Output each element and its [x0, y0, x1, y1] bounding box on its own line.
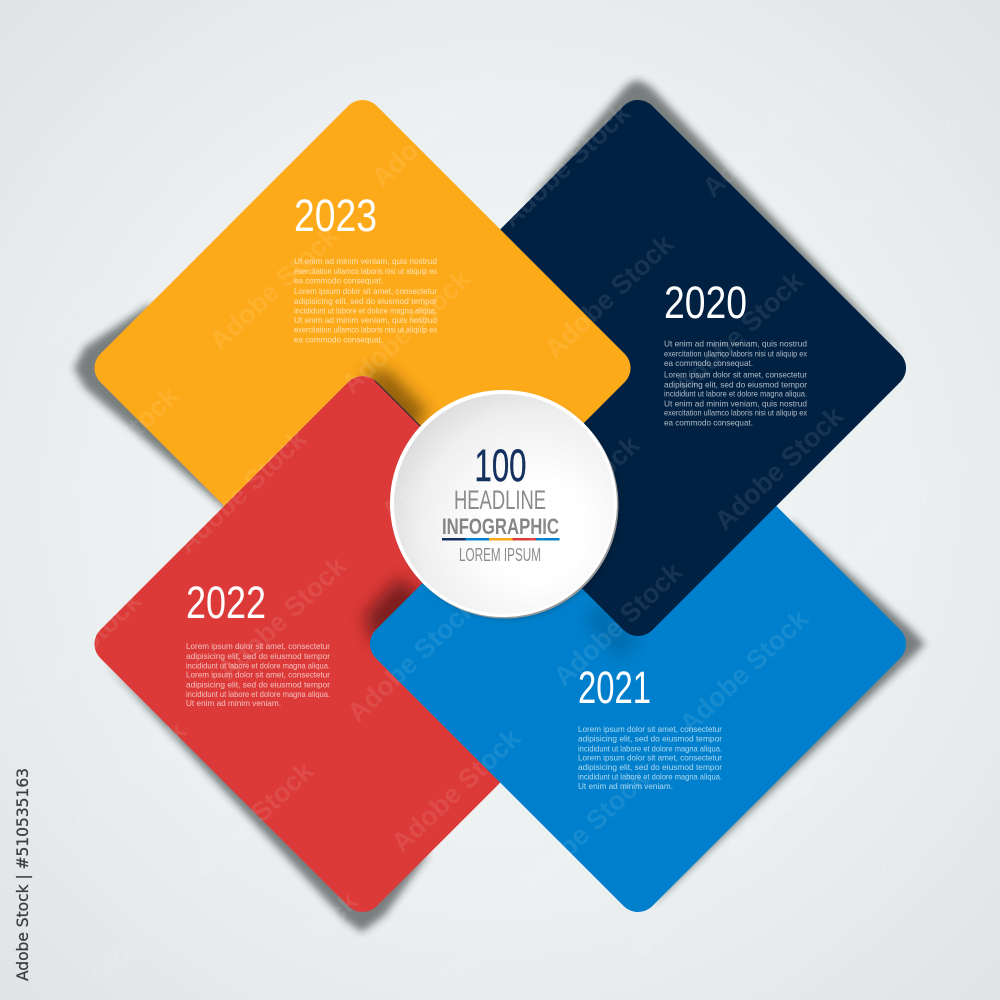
panel: 2023 yellow: ea commodo consequat.: [294, 334, 383, 344]
watermark pattern: Adobe Stock: [674, 603, 815, 739]
watermark pattern: Stock: [85, 916, 160, 989]
panel: 2023 yellow: 2023: [294, 190, 377, 241]
center circle: [390, 390, 619, 619]
watermark pattern: Adobe Stock: [496, 97, 637, 233]
watermark pattern: Adobe Stock: [172, 423, 313, 559]
watermark pattern: Adobe Stock: [44, 380, 185, 516]
panel: 2021 blue: Lorem ipsum dolor sit amet, consectetur: [578, 752, 722, 762]
watermark pattern: Stock: [420, 929, 495, 1000]
watermark pattern: Adobe Stock: [336, 263, 477, 399]
watermark pattern: Adobe Stock: [212, 550, 353, 686]
panel: 2023 yellow: exercitation ullamco laboris nisi ut aliquip ex: [294, 324, 438, 334]
watermark pattern: Adobe Stock: [366, 57, 507, 193]
panel: 2021 blue: adipisicing elit, sed do eiusmod tempor: [578, 734, 722, 744]
panel: 2020 navy: 2020: [664, 277, 747, 328]
watermark pattern: Adobe Stock: [52, 715, 193, 851]
panel: 2022 red: incididunt ut labore et dolore magna aliqua.: [186, 689, 330, 699]
panel: 2020 navy: exercitation ullamco laboris nisi ut aliquip ex: [664, 348, 808, 358]
panel: 2022 red: Ut enim ad minim veniam.: [186, 698, 281, 708]
panel: 2022 red: Lorem ipsum dolor sit amet, consectetur: [186, 641, 330, 651]
watermark pattern: Adobe Stock: [376, 390, 517, 526]
panel: 2020 navy: ea commodo consequat.: [664, 418, 753, 428]
panel: 2020 navy: exercitation ullamco laboris nisi ut aliquip ex: [664, 408, 808, 418]
panel: 2020 navy: Lorem ipsum dolor sit amet, consectetur: [664, 370, 807, 380]
panel: 2023 yellow: incididunt ut labore et dolore magna aliqua.: [294, 306, 437, 316]
watermark pattern: Adobe Stock: [669, 265, 810, 401]
watermark pattern: Adobe Stock: [0, 250, 140, 386]
panel: 2021 blue: adipisicing elit, sed do eiusmod tempor: [578, 762, 722, 772]
watermark pattern: Adobe Stock: [539, 228, 680, 364]
panel: 2020 navy: [362, 92, 914, 644]
number 100: 100: [474, 440, 526, 491]
panel: 2021 blue: Ut enim ad minim veniam.: [578, 781, 673, 791]
panel: 2020 navy: ea commodo consequat.: [664, 358, 753, 368]
watermark pattern: Adobe Stock: [709, 400, 850, 536]
panel: 2023 yellow: Ut enim ad minim veniam, quis nostrud: [294, 256, 437, 266]
panel: 2023 yellow: [94, 100, 631, 506]
panel: 2021 blue: incididunt ut labore et dolore magna aliqua.: [578, 744, 722, 754]
watermark pattern: Adobe Stock: [824, 110, 965, 246]
panel: 2023 yellow: Ut enim ad minim veniam, quis nostrud: [294, 315, 437, 325]
panel: 2022 red: adipisicing elit, sed do eiusmod tempor: [186, 680, 330, 690]
lorem ipsum subtitle: LOREM IPSUM: [459, 545, 541, 565]
panel: 2022 red: incididunt ut labore et dolore magna aliqua.: [186, 660, 330, 670]
panel: 2020 navy: Ut enim ad minim veniam, quis nostrud: [664, 398, 807, 408]
colour rule: [442, 538, 560, 540]
watermark pattern: Stock: [625, 891, 700, 964]
shadows behind panels: [74, 80, 925, 932]
watermark pattern: Adobe Stock: [697, 67, 838, 203]
panel: 2022 red: adipisicing elit, sed do eiusmod tempor: [186, 651, 330, 661]
panel: 2022 red: 2022: [186, 577, 266, 628]
watermark pattern: Adobe Stock: [32, 48, 173, 184]
panel: 2021 blue: 2021: [578, 662, 651, 713]
panel: 2021 blue: [370, 506, 906, 912]
panel: 2020 navy: Ut enim ad minim veniam, quis nostrud: [664, 338, 807, 348]
watermark pattern: Adobe Stock: [161, 88, 302, 224]
panel: 2023 yellow: exercitation ullamco laboris nisi ut aliquip ex: [294, 266, 438, 276]
watermark pattern: Adobe Stock: [386, 722, 527, 858]
panel: 2020 navy: incididunt ut labore et dolore magna aliqua.: [664, 388, 807, 398]
headline: HEADLINE: [454, 485, 546, 515]
panel: 2022 red: [94, 376, 500, 912]
panel: 2023 yellow: adipisicing elit, sed do eiusmod tempor: [294, 296, 437, 306]
watermark pattern: Adobe Stock: [7, 585, 148, 721]
panel: 2020 navy: adipisicing elit, sed do eiusmod tempor: [664, 380, 807, 390]
watermark pattern: Adobe Stock: [834, 442, 975, 578]
panel: 2023 yellow: Lorem ipsum dolor sit amet, consectetur: [294, 286, 437, 296]
watermark pattern: Adobe Stock: [505, 429, 646, 565]
panel: 2022 red: Lorem ipsum dolor sit amet, consectetur: [186, 670, 330, 680]
watermark pattern: Adobe Stock: [204, 220, 345, 356]
watermark pattern: Adobe Stock: [548, 556, 689, 692]
watermark pattern: Stock: [755, 927, 830, 1000]
watermark pattern: Adobe Stock: [514, 763, 655, 899]
infographic label: INFOGRAPHIC: [442, 514, 559, 539]
watermark pattern: Adobe Stock: [846, 773, 987, 909]
panel: 2021 blue: incididunt ut labore et dolore magna aliqua.: [578, 772, 722, 782]
watermark pattern: Adobe Stock: [179, 755, 320, 891]
stock id label: Adobe Stock | #510535163: [13, 768, 32, 981]
watermark pattern: Adobe Stock: [342, 592, 483, 728]
panel: 2021 blue: Lorem ipsum dolor sit amet, consectetur: [578, 724, 722, 734]
watermark pattern: Stock: [290, 886, 365, 959]
panel: 2023 yellow: ea commodo consequat.: [294, 276, 383, 286]
watermark pattern: Adobe Stock: [720, 730, 861, 866]
